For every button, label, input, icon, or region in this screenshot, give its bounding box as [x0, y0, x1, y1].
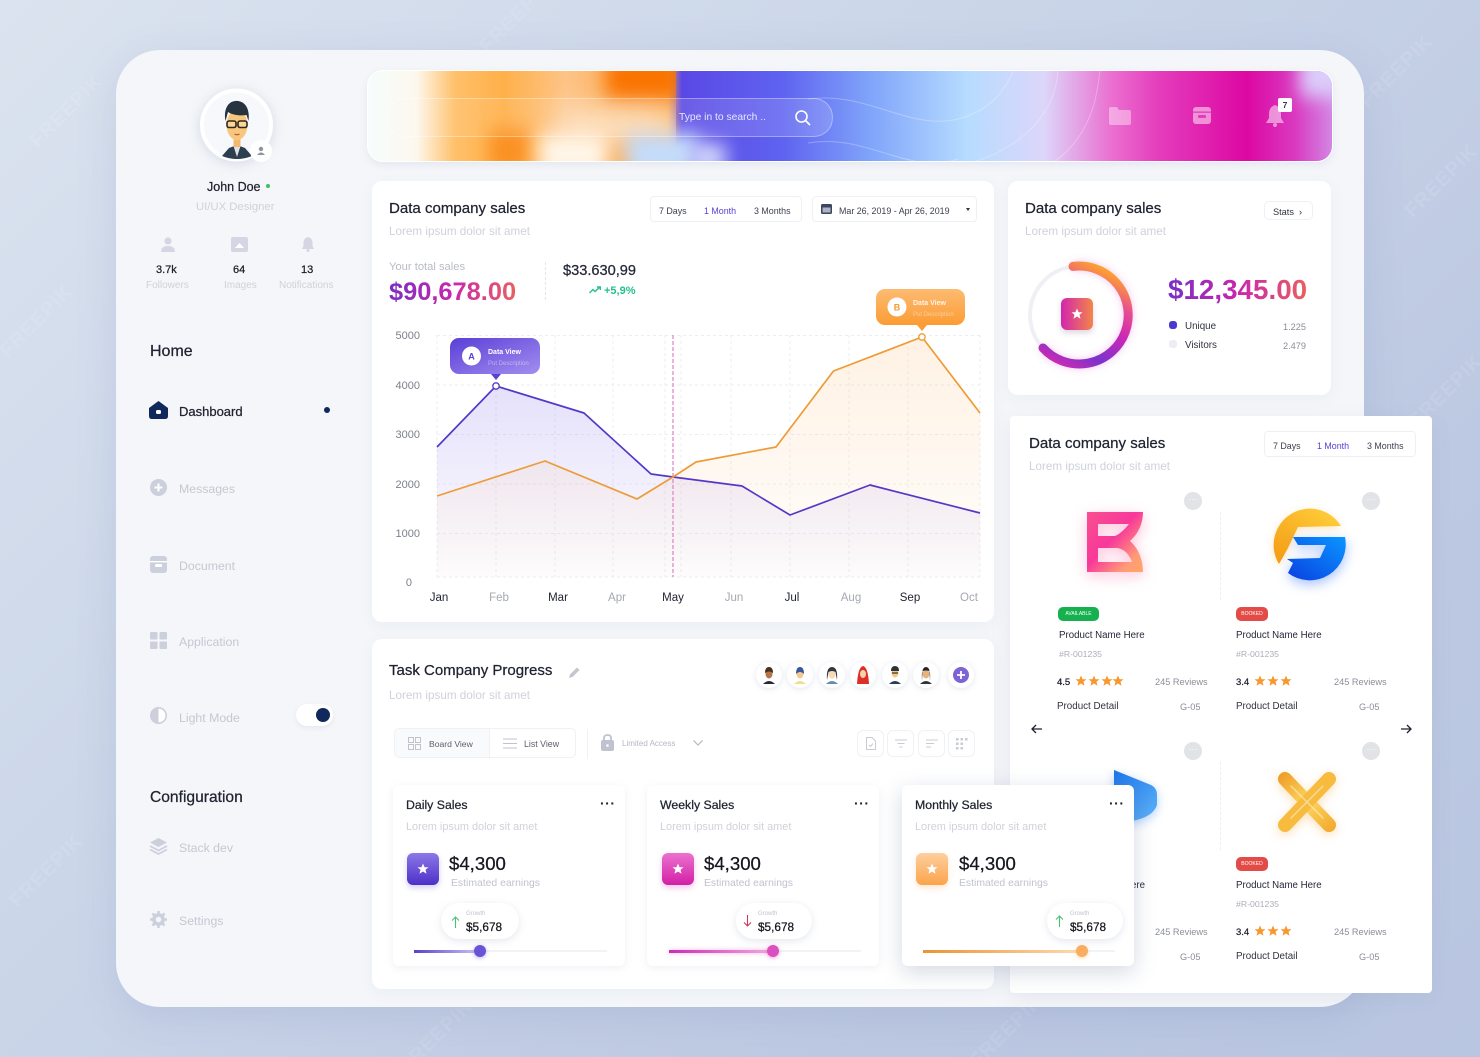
more button: [1184, 742, 1202, 760]
amount caption: Estimated earnings: [451, 878, 540, 889]
active indicator: [324, 407, 330, 413]
card: daily sales: [393, 785, 625, 966]
detail label: Product Detail: [1236, 950, 1298, 962]
tool button: filter: [887, 730, 914, 757]
x axis labels: Jul: [785, 592, 799, 604]
growth pill: [441, 903, 519, 939]
donut total: $12,345.00: [1168, 274, 1307, 305]
legend: visitors: [1169, 340, 1306, 350]
stat: followers label: Followers: [146, 280, 189, 290]
icon: folder: [1109, 107, 1131, 125]
search field: [386, 98, 833, 137]
icon: edit pencil: [569, 668, 580, 678]
text: FREEPIK: [6, 830, 87, 912]
panel: task company progress: [372, 639, 994, 989]
task subtitle: Lorem ipsum dolor sit amet: [389, 688, 530, 702]
more button: [1362, 742, 1380, 760]
logo: pink B: [1080, 508, 1148, 584]
status badge: [1236, 857, 1268, 871]
series A line: [437, 386, 980, 515]
product id: #R-001235: [1236, 898, 1279, 908]
menu dots: ···: [600, 794, 616, 810]
y axis labels: [396, 330, 420, 589]
tooltip A: Put Description: [488, 361, 529, 367]
icon: application: [150, 632, 167, 649]
status badge: [1058, 607, 1099, 621]
arrow: next: [1401, 724, 1412, 734]
tooltip A: Data View: [488, 349, 521, 356]
nav item: Application: Application: [179, 634, 239, 648]
growth value: $5,678: [758, 920, 794, 934]
stat: notifications value: 13: [301, 264, 313, 276]
status badge: BOOKED: [1241, 861, 1263, 867]
icon tile: [662, 853, 694, 885]
more button: [1362, 492, 1380, 510]
online status dot: [266, 184, 270, 188]
sidebar profile: [196, 86, 277, 212]
growth label: Growth: [466, 911, 485, 917]
more button: ···: [1188, 744, 1198, 754]
icon: chevron: [693, 740, 703, 746]
notification count badge: 7: [1283, 100, 1287, 110]
tab: 7 Days: 7 Days: [659, 206, 687, 216]
title: Daily Sales: [406, 798, 468, 812]
title: Weekly Sales: [660, 798, 734, 812]
search placeholder: Type in to search ..: [679, 112, 766, 123]
panel: data company sales chart: [372, 181, 994, 622]
chart grid: [437, 335, 980, 577]
x axis labels: Sep: [900, 592, 920, 604]
review count: 245 Reviews: [1155, 926, 1208, 936]
tool button: document: [857, 730, 884, 757]
growth pill: [736, 903, 812, 939]
toggle switch: [296, 704, 333, 726]
banner gradient art: [368, 71, 1332, 161]
icon: followers: [161, 238, 175, 252]
card: monthly sales: [902, 785, 1134, 966]
nav item: Settings: Settings: [179, 914, 223, 928]
icon: calendar: [821, 204, 832, 214]
stats button label: Stats ›: [1273, 207, 1302, 217]
x axis labels: Apr: [608, 592, 626, 604]
stat: followers value: 3.7k: [156, 264, 177, 276]
star: [417, 863, 429, 875]
nav item: Stack dev: Stack dev: [179, 840, 233, 854]
visitors label: Visitors: [1185, 340, 1217, 350]
icon: list: [503, 738, 517, 749]
slider knob: [1076, 945, 1088, 957]
y axis labels: 2000: [396, 479, 420, 491]
nav item: Light Mode: Light Mode: [179, 710, 240, 724]
logo: orange and blue G: [1270, 506, 1353, 592]
visitors swatch: [1169, 340, 1177, 348]
product name: Product Name Here: [1059, 630, 1145, 640]
unique swatch: [1169, 321, 1177, 329]
slider: [669, 944, 861, 958]
y axis labels: 1000: [396, 528, 420, 540]
x axis labels: Aug: [841, 592, 861, 604]
arrow up: [1055, 915, 1064, 927]
tooltip B: [876, 289, 965, 331]
star: [926, 863, 938, 875]
product 3 (partly hidden): [1108, 742, 1208, 962]
x axis labels: Oct: [960, 592, 979, 604]
icon: light mode: [150, 707, 167, 724]
x axis labels: Jan: [430, 592, 448, 604]
icon: document: [150, 556, 167, 573]
tab: 3 Months: 3 Months: [754, 206, 791, 216]
slider knob: [767, 945, 779, 957]
more button: ···: [1366, 494, 1376, 504]
x axis labels: May: [662, 592, 684, 604]
unique value: 1.225: [1283, 322, 1306, 332]
slider track: [414, 950, 607, 952]
point B: [919, 334, 925, 340]
donut chart: [1028, 258, 1136, 372]
growth indicator: [589, 284, 636, 296]
avatar: John Doe: [196, 86, 277, 167]
icon: search: [795, 110, 810, 126]
donut center icon: [1061, 298, 1093, 330]
subtitle: Lorem ipsum dolor sit amet: [406, 821, 537, 833]
icon: stack: [150, 838, 168, 855]
detail code: G-05: [1359, 952, 1379, 962]
tab: 1 Month: 1 Month: [1317, 441, 1349, 451]
icon: images: [231, 237, 248, 252]
series B line: [437, 337, 980, 499]
nav item: Dashboard: Dashboard: [179, 404, 243, 418]
growth value: $5,678: [1070, 920, 1106, 934]
product 1: [1057, 492, 1208, 712]
more button: [1184, 492, 1202, 510]
icon: board: [408, 737, 421, 750]
slider track: [923, 950, 1115, 952]
task title: Task Company Progress: [389, 662, 552, 678]
icon: settings: [150, 911, 167, 928]
tab: 3 Months: 3 Months: [1367, 441, 1404, 451]
slider: [414, 944, 607, 958]
icon: notifications: [302, 237, 314, 252]
rating stars: [1254, 676, 1292, 686]
profile badge icon: [250, 143, 272, 162]
board view tab: [395, 729, 490, 759]
star: [672, 863, 684, 875]
stat divider: [545, 262, 546, 300]
total sales label: Your total sales: [389, 261, 465, 273]
detail code: G-05: [1180, 702, 1200, 712]
line and area chart: [396, 289, 981, 604]
unique label: Unique: [1185, 320, 1216, 332]
slider fill: [669, 950, 769, 952]
heading: Home: Home: [150, 342, 193, 360]
user role: UI/UX Designer: [196, 200, 274, 212]
secondary sales value: $33.630,99: [563, 262, 636, 278]
rating value: 3.4: [1236, 676, 1249, 688]
y axis labels: 5000: [396, 330, 420, 342]
detail label: Product Detail: [1057, 700, 1119, 712]
growth indicator: +5,9%: [604, 284, 636, 296]
status badge: AVAILABLE: [1065, 611, 1092, 617]
text: FREEPIK: [1401, 140, 1480, 222]
sidebar navigation: [149, 342, 333, 928]
catalogue subtitle: Lorem ipsum dolor sit amet: [1029, 460, 1170, 472]
main dashboard panel: [116, 50, 1364, 1007]
stats button: [1264, 201, 1313, 220]
slider: [923, 944, 1115, 958]
dropdown caret: [966, 208, 970, 211]
rating stars: [1254, 926, 1292, 936]
detail code: G-05: [1180, 952, 1200, 962]
donut subtitle: Lorem ipsum dolor sit amet: [1025, 224, 1166, 238]
catalogue title: Data company sales: [1029, 434, 1165, 452]
series B area: [437, 337, 980, 577]
user name: John Doe: [207, 180, 261, 194]
May marker line: [672, 335, 674, 577]
review count: 245 Reviews: [1334, 926, 1387, 936]
menu dots: ···: [854, 794, 870, 810]
tab: 1 Month: 1 Month: [704, 206, 736, 216]
view switcher: [394, 728, 576, 758]
donut title: Data company sales: [1025, 200, 1161, 216]
tooltip B: B: [894, 302, 901, 312]
series A area: [437, 386, 980, 577]
x axis labels: [430, 592, 979, 604]
product name fragment: Here: [1124, 880, 1145, 890]
growth value: $5,678: [466, 920, 502, 934]
subtitle: Lorem ipsum dolor sit amet: [660, 821, 791, 833]
card: weekly sales: [647, 785, 879, 966]
icon: archive box: [1193, 107, 1211, 124]
logo: blue D: [1108, 770, 1162, 829]
slider track: [669, 950, 861, 952]
heading: Configuration: Configuration: [150, 788, 243, 806]
subtitle: Lorem ipsum dolor sit amet: [915, 821, 1046, 833]
profile stats: [146, 237, 334, 290]
slider fill: [414, 950, 474, 952]
arrow up: [451, 916, 460, 928]
amount caption: Estimated earnings: [704, 878, 793, 889]
icon tile: [407, 853, 439, 885]
y axis labels: 0: [406, 577, 412, 589]
arrow: previous: [1031, 724, 1042, 734]
panel: product catalogue: [1010, 416, 1432, 993]
visitors value: 2.479: [1283, 340, 1306, 350]
y axis labels: 3000: [396, 429, 420, 441]
notification count badge: [1278, 98, 1292, 112]
more button: ···: [1366, 744, 1376, 754]
legend: unique: [1169, 320, 1306, 332]
nav item: Document: Document: [179, 558, 235, 572]
gradient search banner: [367, 70, 1333, 162]
access label: Limited Access: [622, 739, 675, 748]
rating stars: [1076, 676, 1124, 686]
product id: #R-001235: [1236, 648, 1279, 658]
team avatars: [752, 659, 974, 691]
x axis labels: Feb: [489, 592, 509, 604]
growth label: Growth: [758, 911, 777, 917]
review count: 245 Reviews: [1334, 676, 1387, 686]
tooltip B: Put Description: [913, 312, 954, 318]
point A: [493, 383, 499, 389]
chart title: Data company sales: [389, 200, 525, 216]
icon: dashboard: [149, 401, 168, 419]
amount caption: Estimated earnings: [959, 878, 1048, 889]
slider knob: [474, 945, 486, 957]
slider fill: [923, 950, 1078, 952]
board view label: Board View: [429, 739, 473, 749]
tool button: sort: [918, 730, 945, 757]
product id: #R-001235: [1059, 648, 1102, 658]
text: FREEPIK: [1356, 30, 1437, 112]
status badge: BOOKED: [1241, 611, 1263, 617]
icon: lock: [601, 734, 614, 751]
product 2: [1236, 492, 1387, 712]
stat: images label: Images: [224, 280, 257, 290]
tab: 7 Days: 7 Days: [1273, 441, 1301, 451]
stat: notifications label: Notifications: [279, 280, 333, 290]
tooltip B: Data View: [913, 300, 946, 307]
date range text: Mar 26, 2019 - Apr 26, 2019: [839, 206, 950, 216]
title: Monthly Sales: [915, 798, 992, 812]
nav item: Messages: Messages: [179, 482, 235, 496]
menu dots: ···: [1109, 794, 1124, 810]
rating value: 3.4: [1236, 926, 1249, 938]
logo: golden X: [1274, 771, 1340, 839]
x axis labels: Mar: [548, 592, 568, 604]
amount: $4,300: [449, 852, 506, 874]
product name: Product Name Here: [1236, 880, 1322, 890]
status badge: [1236, 607, 1268, 621]
amount: $4,300: [959, 852, 1016, 874]
growth label: Growth: [1070, 911, 1089, 917]
list view label: List View: [524, 739, 559, 749]
rating value: 4.5: [1057, 676, 1070, 688]
detail code: G-05: [1359, 702, 1379, 712]
icon tile: [916, 853, 948, 885]
panel: sales donut: [1008, 181, 1331, 395]
chart subtitle: Lorem ipsum dolor sit amet: [389, 224, 530, 238]
icon: bell: [1266, 105, 1284, 127]
growth pill: [1047, 903, 1123, 939]
amount: $4,300: [704, 852, 761, 874]
total sales value: $90,678.00: [389, 278, 516, 306]
tooltip A: [450, 338, 540, 380]
product name: Product Name Here: [1236, 630, 1322, 640]
y axis labels: 4000: [396, 380, 420, 392]
icon: messages: [150, 479, 167, 496]
arrow down: [743, 915, 752, 927]
x axis labels: Jun: [725, 592, 743, 604]
catalogue tabs: [1264, 431, 1416, 457]
more button: ···: [1188, 494, 1198, 504]
period tabs: [650, 196, 802, 222]
star: [1072, 308, 1082, 319]
detail label: Product Detail: [1236, 700, 1298, 712]
review count: 245 Reviews: [1155, 676, 1208, 686]
text: FREEPIK: [26, 70, 107, 152]
stat: images value: 64: [233, 264, 245, 276]
tooltip A: A: [468, 352, 475, 362]
list view tab: [490, 729, 576, 759]
date range picker: [812, 196, 977, 222]
tool button: grid: [948, 730, 975, 757]
product 4: [1236, 742, 1387, 962]
